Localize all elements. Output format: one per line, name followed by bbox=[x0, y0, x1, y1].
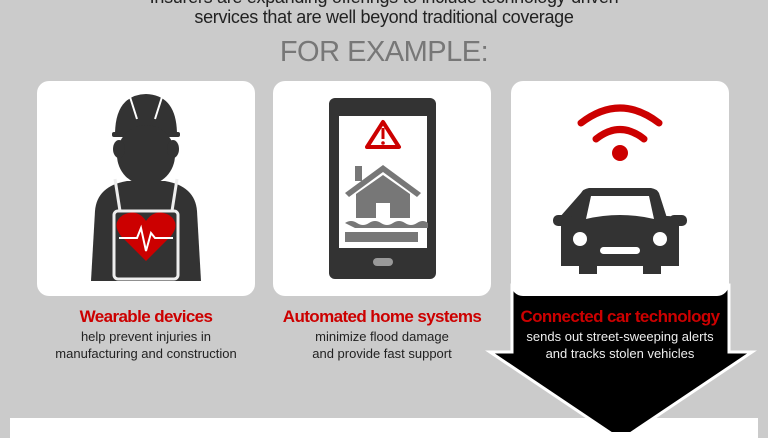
caption: car: and tracks stolen vehicles bbox=[546, 346, 694, 361]
icon: phone bbox=[329, 98, 436, 279]
icon: car bbox=[553, 188, 687, 274]
caption: car: Connected car technology bbox=[520, 307, 720, 326]
bottom white box bbox=[10, 418, 758, 438]
caption: home: minimize flood damage bbox=[315, 329, 449, 344]
card: connected car bbox=[511, 81, 729, 296]
heading: for example: FOR EXAMPLE: bbox=[280, 36, 488, 68]
intro text bbox=[150, 0, 618, 27]
icon: wifi bbox=[581, 108, 659, 139]
caption: home: Automated home systems bbox=[283, 307, 481, 326]
intro text: services that are well beyond traditional coverage bbox=[194, 7, 574, 27]
card: wearable bbox=[37, 81, 255, 296]
icon: heart bbox=[116, 213, 176, 261]
caption: home: and provide fast support bbox=[312, 346, 452, 361]
caption: home bbox=[283, 307, 482, 361]
caption: wearable bbox=[55, 307, 237, 361]
icon: flooded house bbox=[345, 165, 428, 242]
caption: wearable: help prevent injuries in bbox=[81, 329, 211, 344]
caption: car bbox=[520, 307, 720, 361]
card: home systems bbox=[273, 81, 491, 296]
caption: wearable: manufacturing and construction bbox=[55, 346, 237, 361]
caption: car: sends out street-sweeping alerts bbox=[526, 329, 714, 344]
caption: wearable: Wearable devices bbox=[80, 307, 212, 326]
icon: worker bbox=[91, 94, 201, 281]
